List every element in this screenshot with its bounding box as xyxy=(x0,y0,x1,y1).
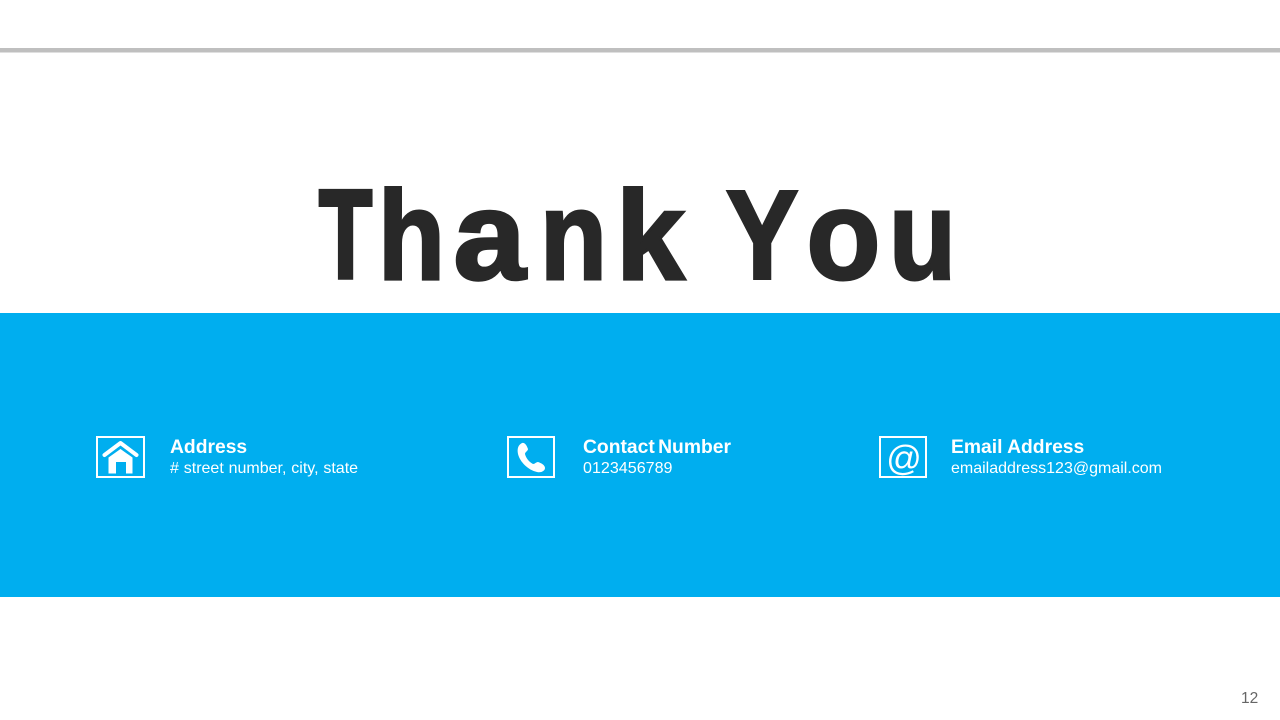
title: h xyxy=(378,166,445,307)
page number: 12 xyxy=(1241,690,1258,707)
contact: address xyxy=(97,437,358,477)
title xyxy=(319,164,956,307)
title: o xyxy=(806,166,880,307)
title: Y xyxy=(726,165,798,305)
contact: email xyxy=(880,437,1162,478)
contact: phone xyxy=(508,437,731,477)
title: a xyxy=(454,166,527,307)
heading: address: Address xyxy=(170,437,247,458)
text: phone number: 0123456789 xyxy=(583,459,673,477)
panel: contact band xyxy=(0,313,1280,597)
title: u xyxy=(889,166,956,307)
text: email: emailaddress123@gmail.com xyxy=(951,460,1162,477)
heading: contact number: Contact Number xyxy=(583,437,731,458)
icon: house xyxy=(97,437,144,477)
title: n xyxy=(540,166,607,307)
title: k xyxy=(616,166,685,306)
icon: at sign: @ xyxy=(886,439,922,478)
heading: email address: Email Address xyxy=(951,437,1084,458)
text: address detail: # street number, city, state xyxy=(170,460,358,477)
icon: phone xyxy=(508,437,554,477)
title: T xyxy=(319,164,372,305)
